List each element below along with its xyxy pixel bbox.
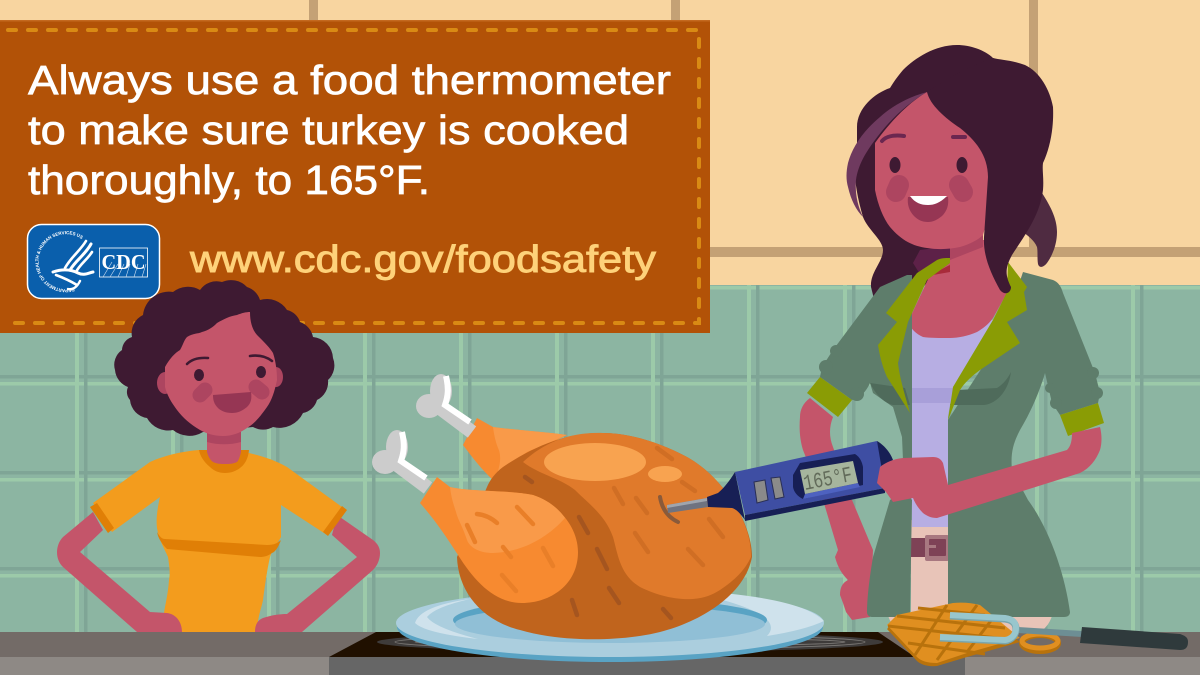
logo: HHS and CDC: CDC (102, 250, 146, 274)
carving fork (940, 615, 1188, 650)
headline text: thoroughly, to 165°F. (28, 157, 430, 203)
stove (329, 632, 965, 675)
eyes (890, 157, 968, 173)
turkey highlights (544, 443, 682, 482)
near thigh (420, 477, 578, 603)
headline text: to make sure turkey is cooked (28, 107, 629, 153)
mouth (908, 196, 948, 222)
display (793, 454, 863, 499)
turkey (372, 430, 752, 639)
near bone (372, 430, 428, 488)
url: www.cdc.gov/foodsafety (189, 239, 656, 281)
eyebrows (882, 136, 965, 141)
girl neck (207, 430, 241, 464)
trivet (887, 603, 1058, 666)
near thigh highlight (450, 487, 565, 553)
turkey breast (523, 433, 751, 599)
logo: HHS and CDC (26, 224, 160, 300)
end cap (877, 441, 893, 470)
headline text (28, 57, 671, 203)
cheeks (896, 185, 963, 192)
woman's right arm and hand (877, 427, 1102, 518)
left arm (800, 398, 873, 620)
jacket chest shadow (870, 372, 1011, 405)
front hair (927, 58, 1053, 293)
girl mouth (213, 392, 251, 413)
thermometer (660, 441, 893, 522)
jacket (819, 272, 1103, 617)
tank top (898, 320, 993, 527)
chest and neck (908, 240, 1007, 338)
girl (57, 280, 380, 632)
buttons (754, 477, 784, 503)
trivet handle (1022, 634, 1058, 651)
lapels (878, 258, 1027, 420)
plate (396, 589, 824, 662)
trivet grid (888, 605, 1016, 660)
counter (0, 632, 1200, 675)
collar accent (930, 265, 950, 275)
girl eyes (194, 366, 266, 381)
far turkey leg (416, 374, 567, 480)
banner (0, 20, 710, 333)
headline text: Always use a food thermometer (28, 57, 671, 103)
girl eyebrows (187, 356, 272, 364)
woman (800, 45, 1104, 632)
girl arms (57, 512, 380, 632)
girl face (165, 312, 277, 436)
belt (911, 535, 949, 561)
face (875, 92, 1000, 249)
far bone (416, 374, 472, 432)
back hair (855, 45, 1020, 303)
girl hair (114, 280, 334, 436)
hair streak (846, 92, 927, 217)
girl shirt trim (90, 450, 347, 557)
skin marks (467, 448, 723, 618)
wall (0, 0, 1200, 286)
girl shirt (93, 450, 342, 632)
probe (667, 498, 708, 513)
ponytail (1023, 190, 1057, 267)
neck shadow (950, 235, 983, 260)
body (735, 441, 885, 515)
cuffs (807, 377, 1104, 436)
girl ears (157, 367, 283, 394)
handle taper (707, 472, 745, 520)
neck back shadow (913, 246, 952, 279)
tiled backsplash (0, 285, 1200, 635)
insertion hole (660, 497, 678, 522)
trousers (887, 520, 1053, 632)
display: 165°F (802, 463, 854, 497)
turkey body (457, 433, 752, 639)
girl cheeks (200, 387, 262, 395)
burner (377, 632, 883, 652)
